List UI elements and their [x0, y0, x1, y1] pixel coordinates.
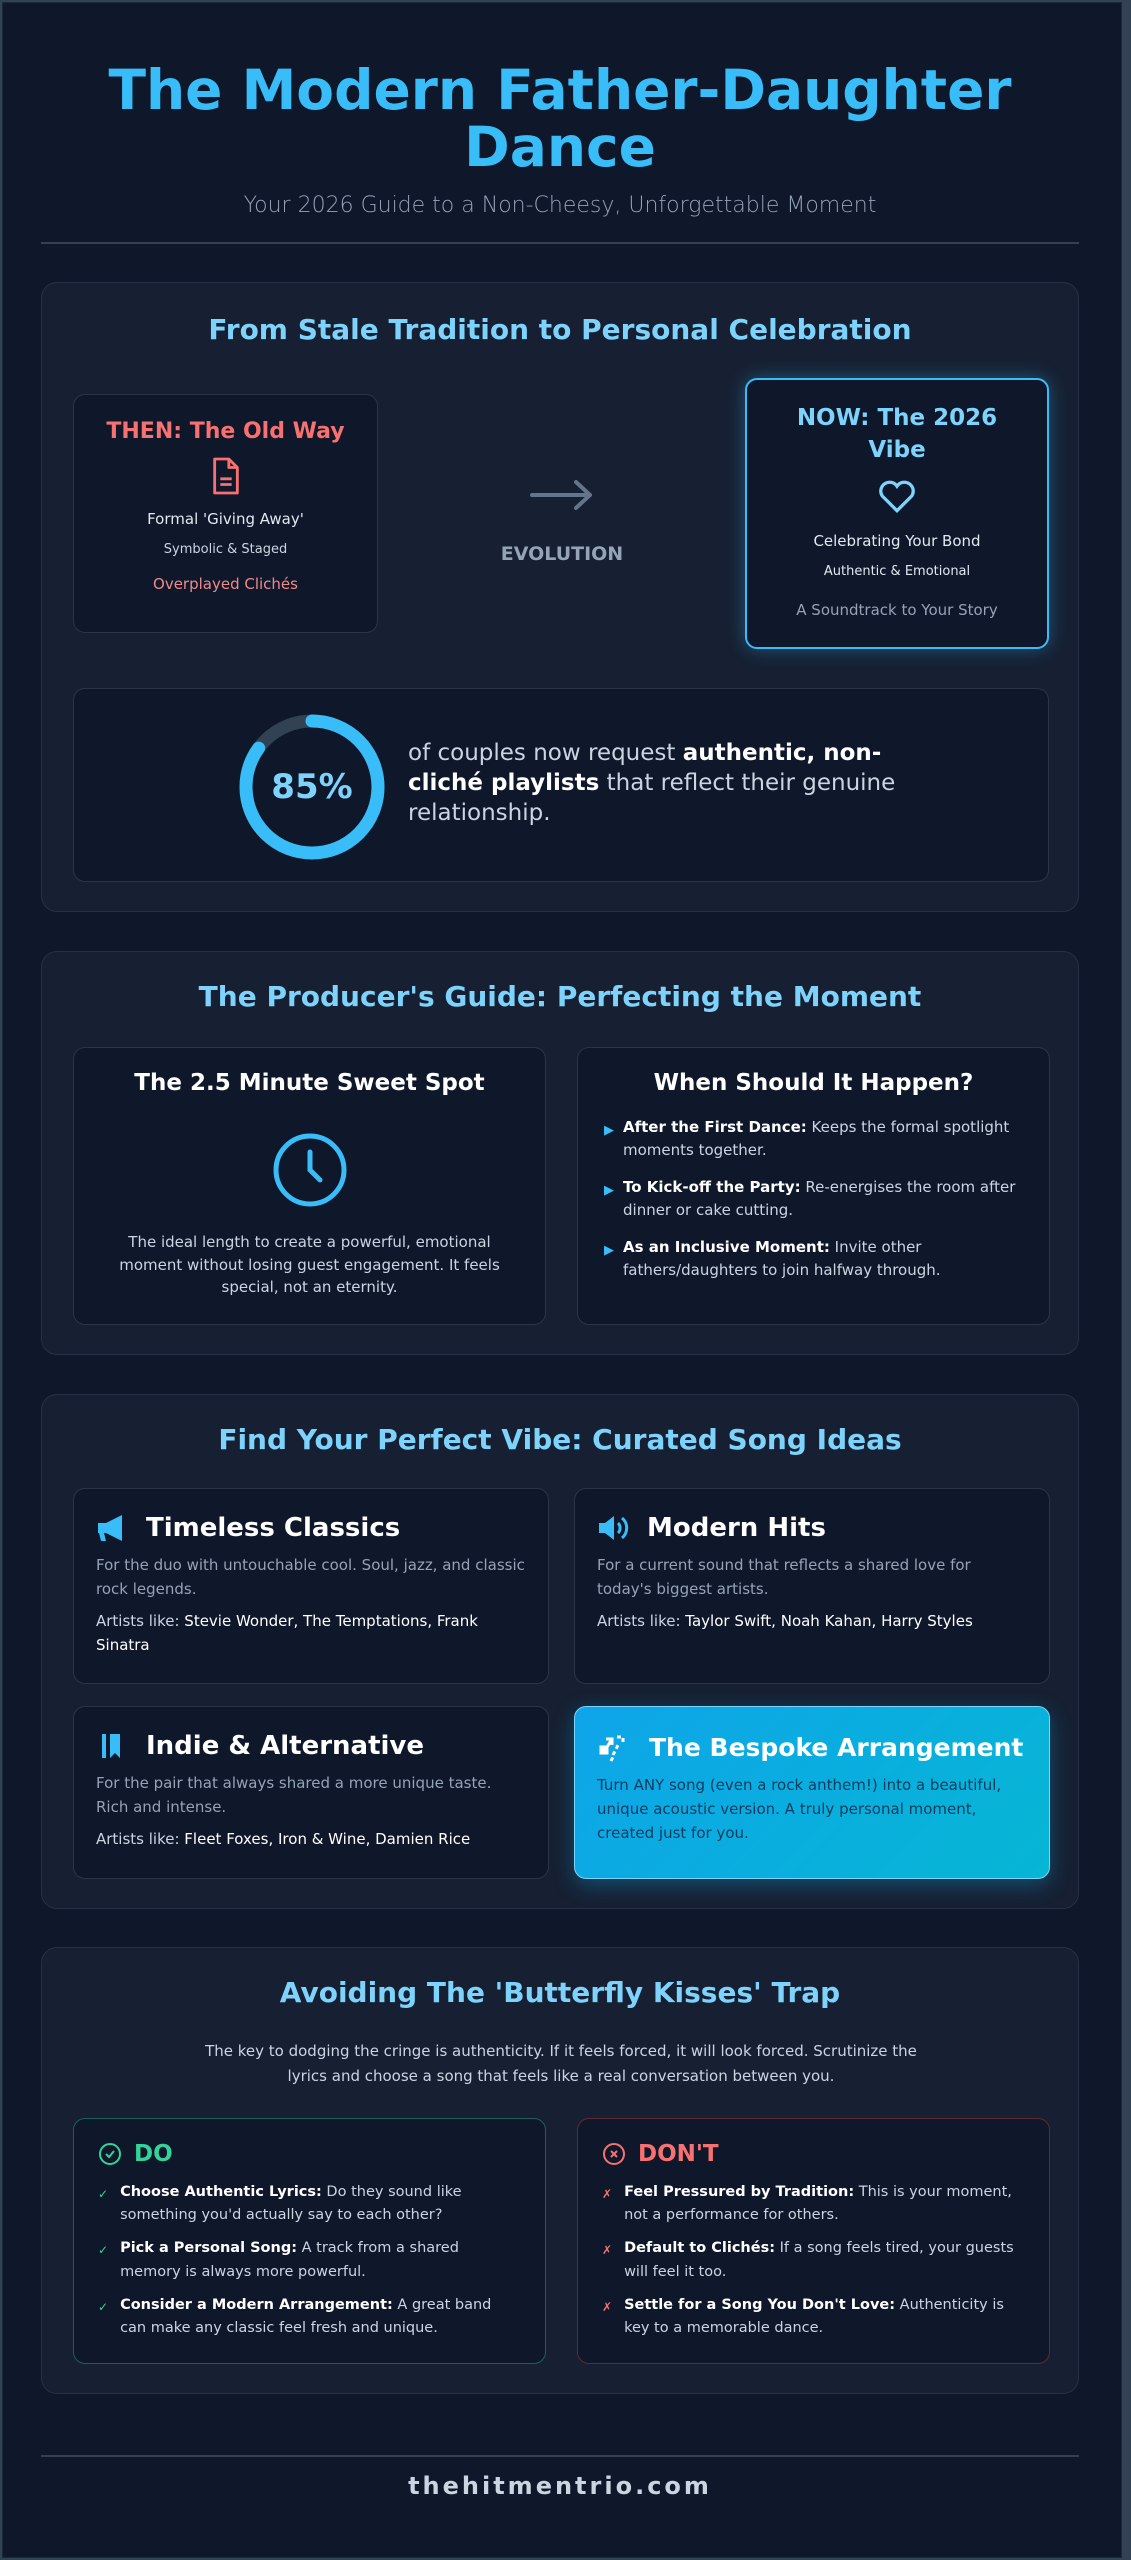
list: don't items: Settle for a Song You Don't Love: Authenticity is key to a memorable dance. — [624, 2297, 1004, 2336]
card: bespoke arrangement — [574, 1706, 1050, 1879]
card: bespoke arrangement: The Bespoke Arrangement — [649, 1732, 1023, 1762]
card: indie: For the pair that always shared a more unique taste. Rich and intense. — [96, 1774, 491, 1816]
card: timing — [577, 1047, 1050, 1325]
list: don't items: ✗ — [602, 2187, 612, 2201]
list: do items: ✓ — [98, 2243, 108, 2257]
chart: 85% ring: 85% — [271, 767, 353, 807]
arrow: evolution: EVOLUTION — [501, 543, 623, 565]
card: bespoke arrangement: Turn ANY song (even a rock anthem!) into a beautiful, unique acoustic version. A truly personal moment, created just for you. — [597, 1776, 1001, 1842]
card: then: Symbolic & Staged — [164, 542, 287, 557]
list: don't items: Default to Clichés: If a song feels tired, your guests will feel it too. — [624, 2240, 1014, 2280]
heading: evolution: From Stale Tradition to Personal Celebration — [208, 313, 912, 346]
list: don't items: ✗ — [602, 2300, 612, 2314]
list: timing options: ▶ — [604, 1183, 614, 1198]
card: do: DO — [134, 2141, 173, 2167]
card: modern hits: Modern Hits — [647, 1513, 826, 1543]
heading: trap: Avoiding The 'Butterfly Kisses' Trap — [280, 1976, 840, 2009]
list: timing options: ▶ — [604, 1243, 614, 1258]
card: then: Overplayed Clichés — [153, 575, 298, 593]
list: do items: ✓ — [98, 2300, 108, 2314]
card: then — [73, 394, 378, 633]
card: indie: Indie & Alternative — [146, 1731, 424, 1761]
list: timing options: ▶ — [604, 1123, 614, 1138]
card: timeless classics: For the duo with untouchable cool. Soul, jazz, and classic rock legends. — [96, 1556, 525, 1598]
icon: document — [213, 458, 239, 494]
card: don't — [577, 2118, 1050, 2364]
card: timeless classics — [73, 1488, 549, 1684]
list: do items: Choose Authentic Lyrics: Do they sound like something you'd actually say to each other? — [120, 2184, 462, 2223]
list: timing options: As an Inclusive Moment: Invite other fathers/daughters to join halfway through. — [623, 1238, 941, 1278]
list: do items — [98, 2184, 491, 2336]
card: now: Celebrating Your Bond — [813, 532, 981, 550]
card: now: NOW: The 2026 — [797, 405, 997, 431]
footer: thehitmentrio.com — [408, 2472, 712, 2500]
list: don't items — [602, 2184, 1014, 2336]
card: don't: DON'T — [638, 2141, 719, 2167]
card: now: Authentic & Emotional — [824, 564, 970, 579]
title — [108, 58, 1012, 179]
card: modern hits: Artists like: Taylor Swift, Noah Kahan, Harry Styles — [597, 1612, 973, 1630]
card: timeless classics: Artists like: Stevie Wonder, The Temptations, Frank Sinatra — [96, 1612, 478, 1654]
stat card — [73, 688, 1049, 882]
card: now: A Soundtrack to Your Story — [796, 601, 998, 619]
panel: evolution — [41, 282, 1079, 912]
heading: guide: The Producer's Guide: Perfecting the Moment — [199, 980, 921, 1013]
icon: clock — [274, 1134, 346, 1206]
card: sweet spot: The 2.5 Minute Sweet Spot — [134, 1070, 485, 1096]
list: do items: Pick a Personal Song: A track from a shared memory is always more powerful. — [120, 2240, 459, 2280]
card: do — [73, 2118, 546, 2364]
list: don't items: Feel Pressured by Tradition: This is your moment, not a performance for others. — [624, 2184, 1012, 2223]
title: Dance — [464, 115, 656, 179]
card: timing: When Should It Happen? — [654, 1070, 973, 1096]
list: do items: ✓ — [98, 2187, 108, 2201]
card: timeless classics: Timeless Classics — [146, 1513, 400, 1543]
stat text: of couples now request authentic, non-cliché playlists that reflect their genuine relationship. — [408, 740, 895, 826]
card: indie: Artists like: Fleet Foxes, Iron & Wine, Damien Rice — [96, 1830, 470, 1848]
panel: butterfly kisses — [41, 1947, 1079, 2394]
card: now — [745, 378, 1049, 649]
list: do items: Consider a Modern Arrangement: A great band can make any classic feel fresh and unique. — [120, 2297, 491, 2336]
title: The Modern Father-Daughter — [108, 58, 1012, 122]
icon: heart — [879, 480, 915, 513]
heading: songs: Find Your Perfect Vibe: Curated Song Ideas — [218, 1423, 902, 1456]
card: modern hits: For a current sound that reflects a shared love for today's biggest artists. — [597, 1556, 971, 1598]
list: timing options: After the First Dance: Keeps the formal spotlight moments together. — [623, 1118, 1009, 1158]
card: then: Formal 'Giving Away' — [147, 510, 304, 528]
list: timing options — [604, 1118, 1016, 1278]
list: timing options: To Kick-off the Party: Re-energises the room after dinner or cake cutting. — [623, 1178, 1015, 1218]
arrow: evolution — [501, 480, 623, 565]
panel: producer's guide — [41, 951, 1079, 1355]
card: indie — [73, 1706, 549, 1879]
card: modern hits — [574, 1488, 1050, 1684]
card: then: THEN: The Old Way — [106, 419, 345, 444]
subtitle: Your 2026 Guide to a Non-Cheesy, Unforgettable Moment — [244, 193, 876, 218]
card: sweet spot: The ideal length to create a powerful, emotional moment without losing guest engagement. It feels special, not an eternity. — [119, 1233, 500, 1296]
intro text: The key to dodging the cringe is authenticity. If it feels forced, it will look forced. Scrutinize the lyrics and choose a song that feels like a real conversation between you. — [205, 2042, 917, 2085]
chart: 85% ring — [240, 714, 384, 860]
card: now: Vibe — [868, 437, 926, 463]
list: don't items: ✗ — [602, 2243, 612, 2257]
card: sweet spot — [73, 1047, 546, 1325]
panel: song ideas — [41, 1394, 1079, 1909]
